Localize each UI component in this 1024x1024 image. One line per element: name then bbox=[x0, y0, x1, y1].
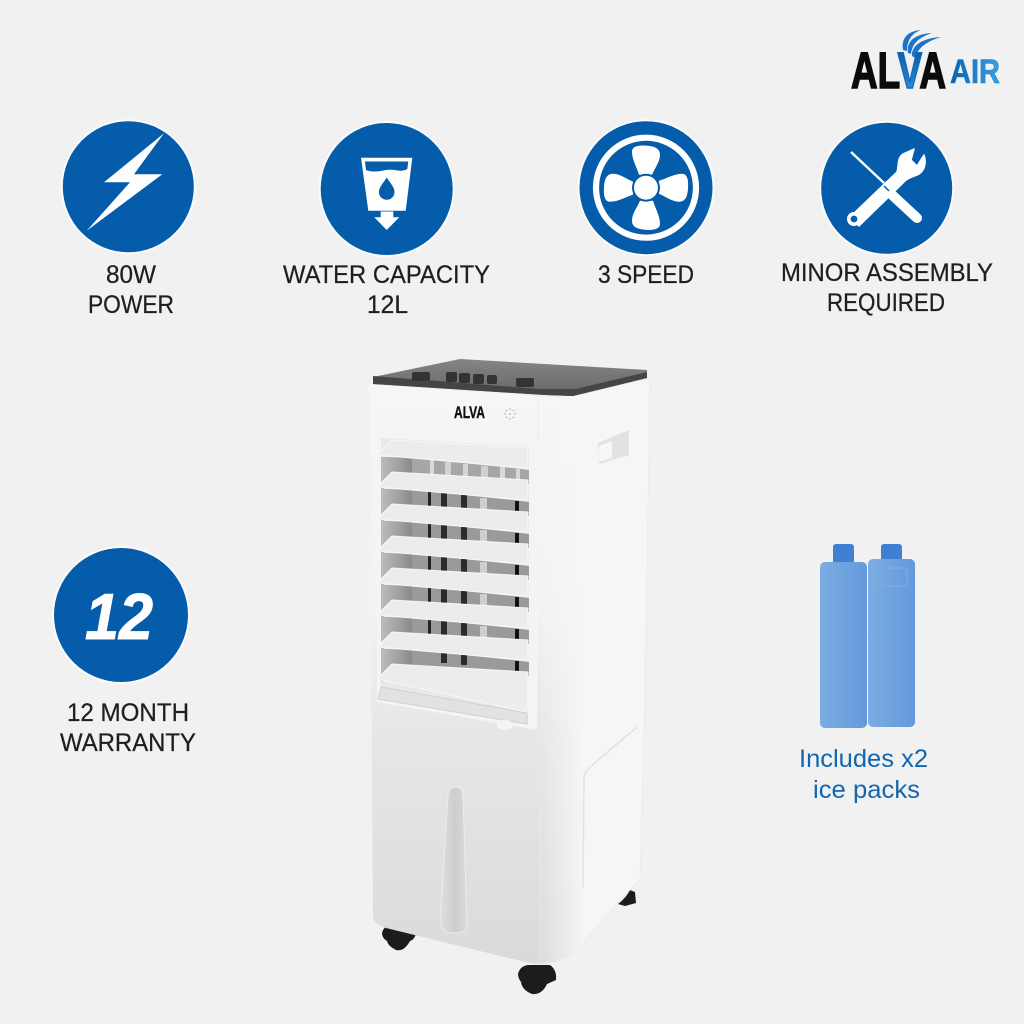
logo swoosh bbox=[903, 30, 941, 58]
louver panel bbox=[377, 438, 529, 730]
feature: 3 speed bbox=[578, 119, 714, 289]
ice pack right bbox=[868, 559, 915, 727]
label: minor assembly required: REQUIRED bbox=[827, 289, 945, 317]
label: 80W power: 80W bbox=[106, 261, 156, 289]
side face bbox=[538, 378, 650, 964]
label: water capacity: WATER CAPACITY bbox=[283, 261, 490, 289]
logo wordmark: ALVA bbox=[851, 42, 946, 99]
caption: ice packs bbox=[799, 745, 928, 804]
grille background bbox=[381, 438, 529, 724]
caption: ice packs: Includes x2 bbox=[799, 745, 928, 773]
ice packs bbox=[820, 544, 915, 728]
control knobs bbox=[412, 372, 534, 387]
logo AIR: AIR bbox=[950, 53, 1000, 91]
icon: lightning bolt bbox=[61, 119, 196, 254]
top lid bbox=[373, 359, 647, 396]
carry handle bbox=[598, 430, 629, 464]
feature: warranty bbox=[52, 546, 196, 757]
logo: Alva Air bbox=[851, 30, 1000, 99]
icon: wrench and screwdriver bbox=[819, 121, 954, 256]
louver slats bbox=[377, 440, 528, 712]
label: water capacity: 12L bbox=[367, 291, 408, 319]
label: 12 month warranty: WARRANTY bbox=[60, 729, 196, 757]
water level window bbox=[440, 787, 467, 933]
latch bbox=[497, 720, 513, 730]
grille strips bbox=[381, 457, 529, 490]
label: 80W power bbox=[88, 261, 174, 319]
casters bbox=[382, 890, 636, 994]
icon: water cup bbox=[319, 121, 455, 257]
icon: fan bbox=[578, 119, 714, 256]
icon: 12 badge: 12 bbox=[85, 580, 153, 653]
icon: 12 badge bbox=[52, 546, 190, 684]
feature: minor assembly bbox=[781, 121, 993, 317]
label: 3 speed: 3 SPEED bbox=[598, 261, 694, 289]
caption: ice packs: ice packs bbox=[813, 776, 920, 804]
product brand label: ALVA bbox=[454, 404, 485, 422]
ice pack left bbox=[820, 562, 867, 728]
feature: water capacity bbox=[283, 121, 490, 319]
label: 12 month warranty bbox=[60, 699, 196, 757]
label: minor assembly required bbox=[781, 259, 993, 317]
label: water capacity bbox=[283, 261, 490, 319]
label: minor assembly required: MINOR ASSEMBLY bbox=[781, 259, 993, 287]
label: 12 month warranty: 12 MONTH bbox=[67, 699, 189, 727]
bottom tray bbox=[378, 687, 527, 724]
sensor dots bbox=[504, 408, 516, 420]
label: 80W power: POWER bbox=[88, 291, 174, 319]
feature: 80W power bbox=[61, 119, 196, 319]
ice pack caps bbox=[833, 544, 902, 564]
ice pack label panel bbox=[873, 568, 907, 586]
cooler body bbox=[369, 378, 650, 964]
product: air cooler bbox=[369, 359, 650, 994]
side panel detail bbox=[583, 727, 637, 887]
louver frame bbox=[377, 428, 542, 730]
